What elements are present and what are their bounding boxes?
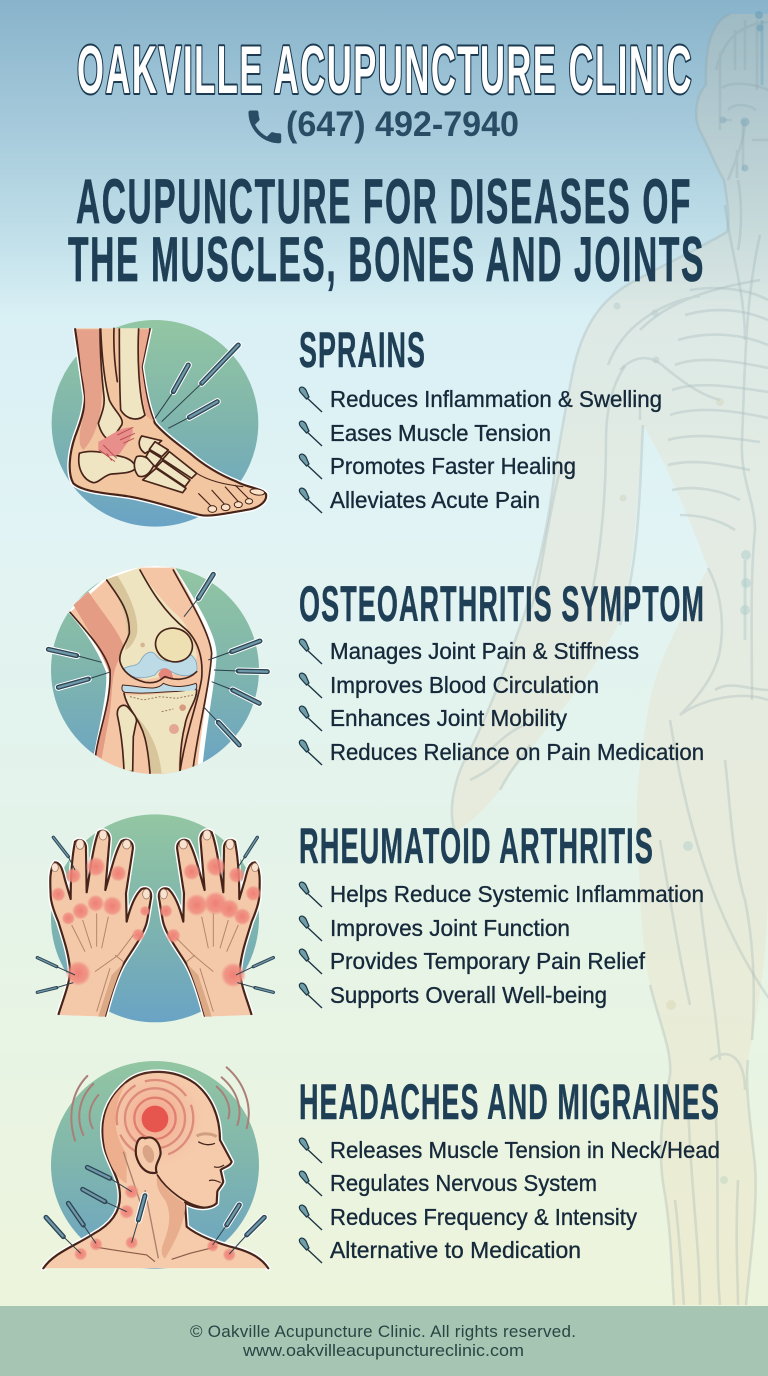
footer: © Oakville Acupuncture Clinic. All rights reserved. [190, 1322, 576, 1341]
section: rheumatoid arthritis: Helps Reduce Systemic Inflammation [330, 881, 704, 907]
needles [46, 1167, 264, 1254]
illustration: ankle sprain [52, 320, 266, 527]
section: rheumatoid arthritis [299, 818, 704, 1008]
section: osteoarthritis symptom: Manages Joint Pain & Stiffness [330, 638, 639, 664]
section: headaches and migraines: Reduces Frequency & Intensity [330, 1204, 637, 1230]
illustration: rheumatoid arthritis hands [37, 814, 273, 1022]
section: osteoarthritis symptom: Enhances Joint Mobility [330, 705, 567, 731]
footer [0, 1306, 768, 1376]
right hand [159, 830, 261, 1017]
section: headaches and migraines [299, 1074, 720, 1263]
section: headaches and migraines: Regulates Nervous System [330, 1170, 597, 1196]
left hand [50, 830, 151, 1017]
needles [37, 837, 273, 992]
background acupuncture body figure [452, 11, 768, 1305]
section: rheumatoid arthritis: Supports Overall Well-being [330, 982, 607, 1008]
section: osteoarthritis symptom: Reduces Reliance on Pain Medication [330, 739, 704, 765]
section: rheumatoid arthritis: Improves Joint Function [330, 915, 570, 941]
section: sprains: SPRAINS [299, 322, 426, 378]
section: sprains: Promotes Faster Healing [330, 453, 576, 479]
section: sprains [299, 322, 662, 513]
illustration: head with migraine [43, 1061, 268, 1269]
section: osteoarthritis symptom: Improves Blood Circulation [330, 672, 599, 698]
main heading [68, 167, 705, 295]
footer: www.oakvilleacupunctureclinic.com [242, 1341, 524, 1360]
section: rheumatoid arthritis: Provides Temporary Pain Relief [330, 948, 645, 974]
section: sprains: Eases Muscle Tension [330, 420, 551, 446]
icon: phone [248, 110, 281, 143]
section: headaches and migraines: Alternative to Medication [330, 1237, 581, 1263]
phone contact: (647) 492-7940 [286, 105, 519, 144]
section: sprains: Reduces Inflammation & Swelling [330, 386, 662, 412]
needles [155, 345, 238, 428]
illustration: knee osteoarthritis [48, 565, 267, 775]
section: headaches and migraines: Releases Muscle Tension in Neck/Head [330, 1137, 720, 1163]
section: sprains: Alleviates Acute Pain [330, 487, 540, 513]
section: osteoarthritis symptom [299, 576, 705, 765]
needles [48, 574, 267, 745]
